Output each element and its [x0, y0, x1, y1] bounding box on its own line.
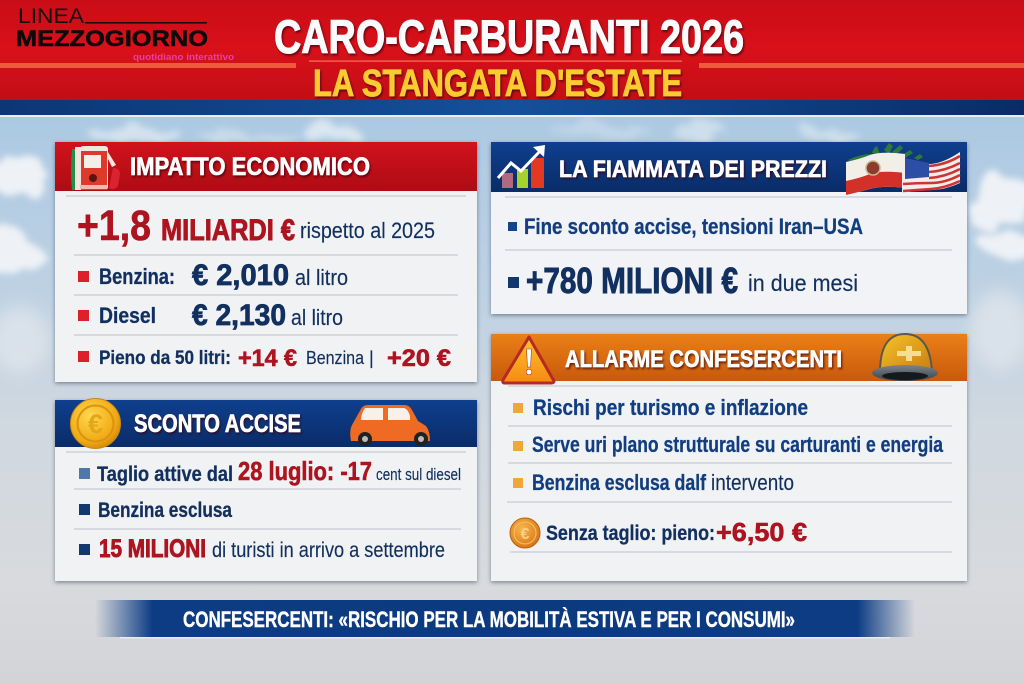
icon: small coin: €	[521, 526, 530, 543]
row: pieno da 50 litri: +20 €	[387, 345, 451, 372]
title: CARO-CARBURANTI 2026	[274, 10, 744, 63]
icon: small coin	[510, 518, 540, 548]
row: benzina: € 2,010	[192, 259, 289, 292]
row: diesel	[78, 299, 343, 332]
stat: +1,8 miliardi: MILIARDI €	[161, 214, 295, 247]
row: taglio attive: cent sul diesel	[376, 465, 461, 484]
row: pieno da 50 litri	[78, 345, 451, 372]
row: rischi: Rischi per turismo e inflazione	[533, 395, 808, 420]
heading: impatto economico: IMPATTO ECONOMICO	[130, 153, 370, 181]
icon: flags	[846, 143, 960, 195]
icon: euro coin	[70, 398, 120, 448]
row: pieno da 50 litri: |	[369, 348, 374, 368]
icon: fuel pump	[71, 146, 120, 190]
row: 15 milioni: di turisti in arrivo a settembre	[212, 539, 445, 562]
stat: +1,8 miliardi: rispetto al 2025	[300, 218, 435, 243]
bottom banner	[95, 600, 915, 638]
panel: la fiammata dei prezzi	[491, 142, 967, 314]
row: diesel: al litro	[291, 305, 343, 330]
row: benzina esclusa dal intervento: intervento	[711, 470, 794, 495]
row: benzina esclusa: Benzina esclusa	[98, 499, 232, 522]
stat: +1,8 miliardi: +1,8	[77, 202, 151, 250]
bottom banner: CONFESERCENTI: «RISCHIO PER LA MOBILITÀ ESTIVA E PER I CONSUMI»	[183, 607, 795, 632]
icon: warning triangle	[503, 337, 554, 383]
row: taglio attive: Taglio attive dal	[97, 463, 233, 486]
row: 15 milioni	[79, 535, 445, 563]
stat: +780 milioni: in due mesi	[748, 270, 858, 296]
row: taglio attive	[79, 456, 461, 486]
row: benzina: al litro	[295, 265, 348, 290]
subtitle: LA STANGATA D'ESTATE	[313, 63, 682, 105]
panel: allarme confesercenti	[491, 334, 967, 581]
row: diesel: € 2,130	[192, 299, 286, 332]
row: benzina	[78, 259, 348, 292]
heading: sconto accise: SCONTO ACCISE	[134, 410, 301, 438]
stat: +780 milioni: +780 MILIONI €	[526, 260, 738, 301]
icon: euro coin: €	[88, 409, 103, 439]
row: pieno da 50 litri: +14 €	[238, 345, 297, 372]
row: taglio attive: 28 luglio: -17	[238, 456, 372, 486]
logo: MEZZOGIORNO	[16, 26, 208, 51]
header: impatto economico	[55, 142, 477, 191]
heading: allarme confesercenti: ALLARME CONFESERCENTI	[565, 346, 842, 373]
header band	[0, 0, 1024, 117]
icon: orange car	[350, 405, 430, 446]
logo: LINEA	[18, 5, 84, 28]
stat: +1,8 miliardi	[77, 202, 435, 250]
row: pieno da 50 litri: Benzina	[306, 348, 365, 368]
icon: helmet	[872, 334, 938, 381]
logo: quotidiano interattivo	[133, 52, 234, 63]
row: senza taglio: Senza taglio: pieno:	[546, 522, 715, 545]
row: pieno da 50 litri: Pieno da 50 litri:	[99, 348, 231, 369]
header: sconto accise	[55, 400, 477, 447]
row: benzina esclusa dal intervento: Benzina esclusa dalf	[532, 470, 707, 495]
icon: rising chart	[498, 145, 545, 188]
row: senza taglio: +6,50 €	[716, 517, 807, 547]
row: 15 milioni: 15 MILIONI	[99, 535, 206, 563]
heading: la fiammata dei prezzi: LA FIAMMATA DEI PREZZI	[559, 156, 827, 183]
header: allarme confesercenti	[491, 334, 967, 381]
row: benzina: Benzina:	[99, 264, 175, 289]
row: fine sconto accise: Fine sconto accise, tensioni Iran–USA	[524, 214, 863, 239]
header: la fiammata dei prezzi	[491, 142, 967, 192]
row: diesel: Diesel	[99, 303, 156, 328]
panel: sconto accise	[55, 398, 477, 581]
row: senza taglio	[510, 517, 807, 548]
logo	[16, 5, 234, 63]
panel: impatto economico	[55, 142, 477, 382]
